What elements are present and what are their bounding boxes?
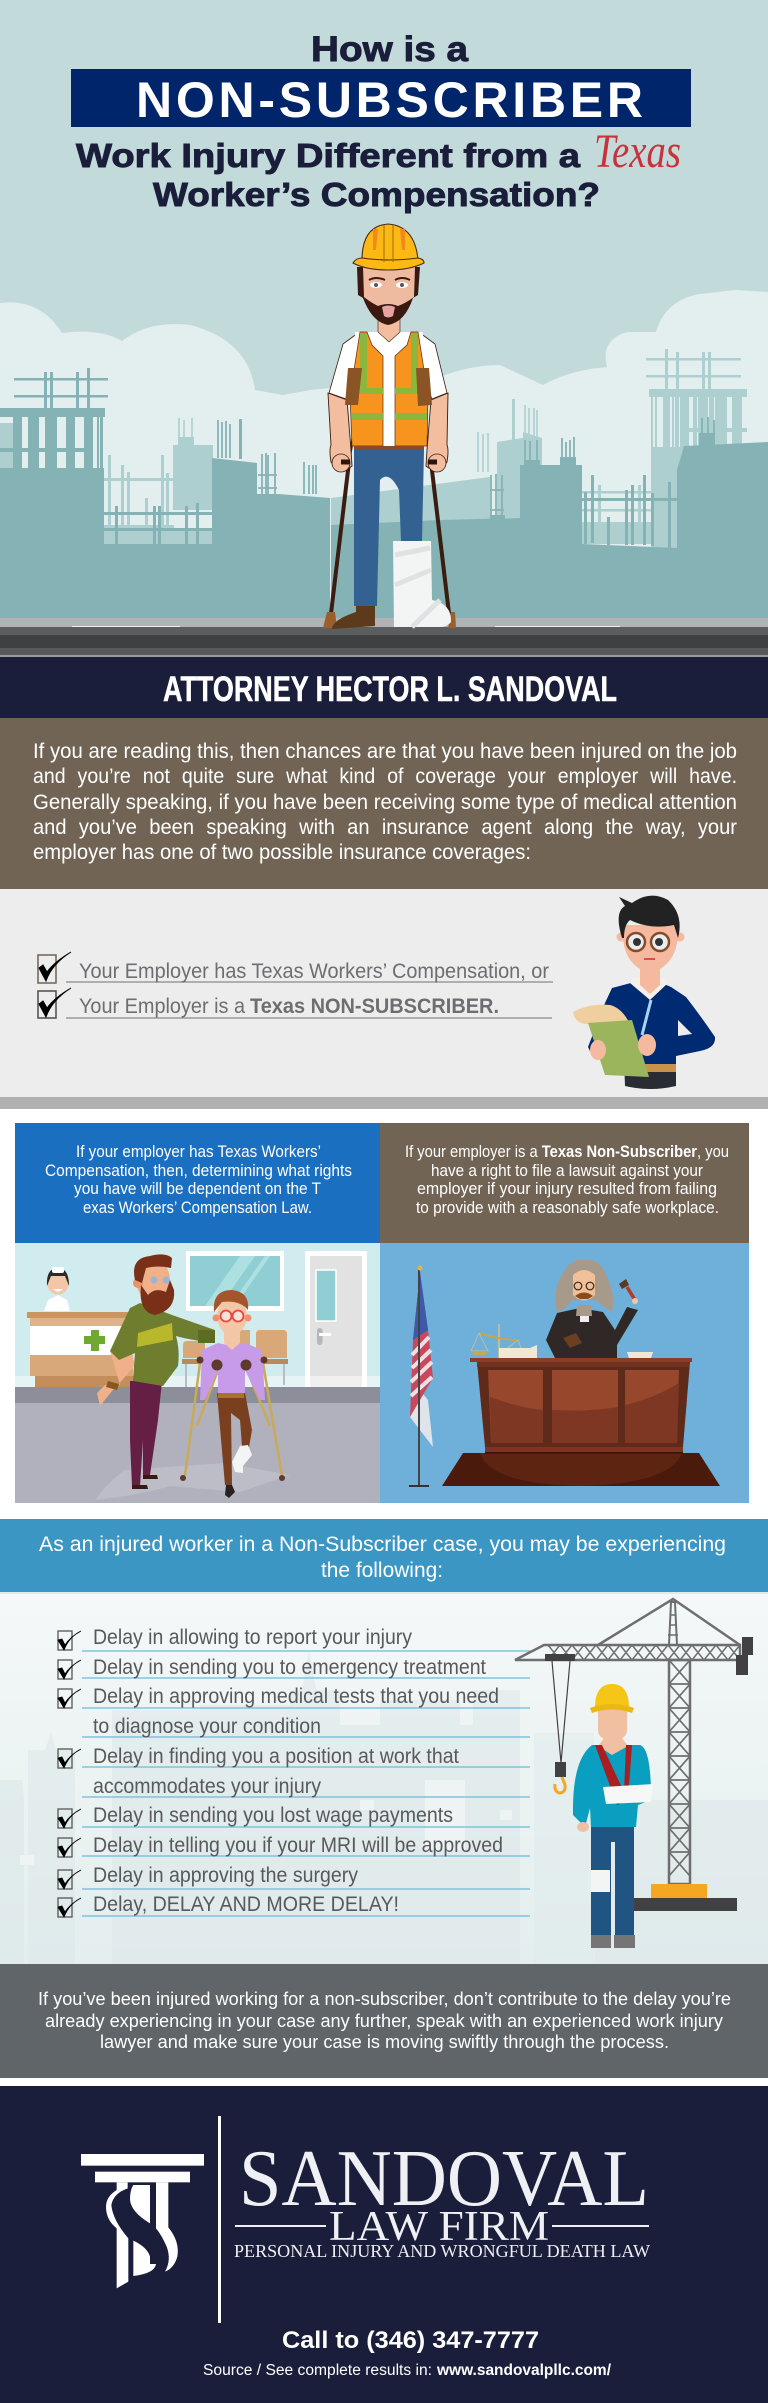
check item 2: Your Employer is a — [79, 995, 245, 1018]
panel: non-subscriber text: If your employer is a Texas Non-Subscriber, you — [405, 1143, 729, 1161]
source line: www.sandovalpllc.com/ — [436, 2362, 612, 2379]
closing message panel: lawyer and make sure your case is moving swiftly through the process. — [100, 2032, 669, 2052]
list items: Delay in approving medical tests that you need — [93, 1685, 499, 1708]
logo wordmark: PERSONAL INJURY AND WRONGFUL DEATH LAW — [234, 2241, 650, 2261]
panel: delay checklist — [0, 1592, 768, 1964]
section heading: non-subscriber experience: As an injured worker in a Non-Subscriber case, you may be experiencing — [39, 1533, 726, 1556]
list items: Delay, DELAY AND MORE DELAY! — [93, 1893, 399, 1916]
title line 4: Worker’s Compensation? — [153, 176, 600, 213]
title line 3 — [76, 125, 681, 178]
flag — [409, 1266, 433, 1487]
list items: Delay in telling you if your MRI will be approved — [93, 1834, 503, 1857]
section heading: non-subscriber experience: the following: — [321, 1559, 443, 1582]
intro text panel: and you’ve been speaking with an insurance agent along the way, your — [33, 816, 737, 839]
illustration: injured construction worker on crutches — [323, 224, 456, 629]
shoe — [332, 606, 375, 629]
list items: Delay in approving the surgery — [93, 1864, 358, 1887]
intro text panel: and you’re not quite sure what kind of coverage your employer will have. — [33, 765, 737, 788]
list items: to diagnose your condition — [93, 1715, 321, 1738]
intro text panel: Generally speaking, if you have been receiving some type of medical attention — [33, 791, 737, 814]
panel: workers' compensation text: Compensation, then, determining what rights — [45, 1162, 352, 1180]
chairs — [182, 1330, 288, 1387]
closing message panel: If you’ve been injured working for a non-subscriber, don’t contribute to the delay you’re — [38, 1989, 731, 2009]
road — [0, 618, 768, 657]
jeans — [354, 446, 424, 451]
panel: workers' compensation text: If your employer has Texas Workers’ — [76, 1143, 321, 1161]
closing message panel — [0, 1964, 768, 2078]
scales and papers — [471, 1324, 653, 1358]
footer panel — [0, 2086, 768, 2403]
list items: Delay in sending you to emergency treatment — [93, 1656, 486, 1679]
list items — [82, 1626, 530, 1916]
call to action: Call to (346) 347-7777 — [282, 2327, 539, 2354]
hard hat — [362, 224, 418, 260]
list items: Delay in allowing to report your injury — [93, 1626, 412, 1649]
title line 3: Work Injury Different from a — [76, 137, 581, 174]
arms — [328, 393, 352, 470]
list items: Delay in sending you lost wage payments — [93, 1804, 453, 1827]
panel: workers' compensation text: exas Workers’ Compensation Law. — [83, 1199, 312, 1217]
title line 3: Texas — [594, 125, 681, 178]
logo wordmark — [234, 2135, 650, 2261]
illustration: injured worker with sling — [573, 1684, 653, 1948]
judge bench — [442, 1358, 720, 1486]
check item 2: Texas NON-SUBSCRIBER. — [250, 995, 499, 1018]
closing message panel: already experiencing in your case any further, speak with an experienced work injury — [45, 2011, 723, 2031]
reception desk — [27, 1312, 135, 1387]
panel: non-subscriber text: have a right to file a lawsuit against your — [431, 1162, 703, 1180]
illustration: man with clipboard — [573, 896, 715, 1089]
title: How is a: How is a — [311, 30, 469, 69]
panel: workers' compensation text — [15, 1123, 380, 1243]
source line: Source / See complete results in: — [203, 2362, 432, 2379]
logo wordmark: SANDOVAL — [239, 2135, 649, 2223]
check item 2 — [38, 988, 552, 1018]
header bar: attorney name — [0, 657, 768, 718]
illustration: tower crane — [515, 1599, 753, 1911]
panel: non-subscriber text: employer if your injury resulted from failing — [417, 1180, 717, 1198]
panel: non-subscriber text: to provide with a reasonably safe workplace. — [416, 1199, 719, 1217]
panel: non-subscriber text — [380, 1123, 749, 1243]
list items: accommodates your injury — [93, 1775, 321, 1798]
neck and head — [378, 318, 400, 342]
section heading: non-subscriber experience — [0, 1519, 768, 1592]
logo wordmark: LAW FIRM — [329, 2204, 549, 2250]
intro text panel: If you are reading this, then chances are that you have been injured on the job — [33, 740, 737, 763]
logo divider — [218, 2116, 221, 2323]
bearded man — [97, 1254, 215, 1489]
left skyline — [0, 368, 330, 620]
crutch pads — [345, 368, 432, 406]
window — [186, 1251, 284, 1311]
judge — [546, 1260, 638, 1358]
hands — [332, 454, 350, 472]
check item 1: Your Employer has Texas Workers’ Compensation, or — [79, 960, 549, 983]
check item 1 — [38, 952, 553, 983]
header bar: attorney name: ATTORNEY HECTOR L. SANDOVAL — [163, 670, 617, 709]
hero panel: skyline background — [0, 0, 768, 657]
intro text panel — [0, 718, 768, 889]
right skyline — [331, 349, 768, 620]
door — [305, 1251, 367, 1387]
intro text panel: employer has one of two possible insurance coverages: — [33, 841, 531, 864]
check boxes — [58, 1631, 81, 1917]
nurse — [44, 1267, 70, 1311]
logo pillar mark — [81, 2154, 204, 2288]
torso and vest — [352, 332, 427, 446]
panel: two insurance coverages — [0, 889, 768, 1109]
title banner: NON-SUBSCRIBER — [136, 72, 643, 128]
source line — [203, 2362, 612, 2379]
faint city skyline — [0, 1650, 768, 1964]
man on crutches — [180, 1290, 285, 1498]
panel: workers' compensation text: you have will be dependent on the T — [74, 1180, 321, 1198]
illustration: clinic scene — [15, 1243, 380, 1503]
illustration: courtroom scene — [380, 1243, 749, 1503]
cast — [393, 541, 451, 627]
list items: Delay in finding you a position at work that — [93, 1745, 459, 1768]
